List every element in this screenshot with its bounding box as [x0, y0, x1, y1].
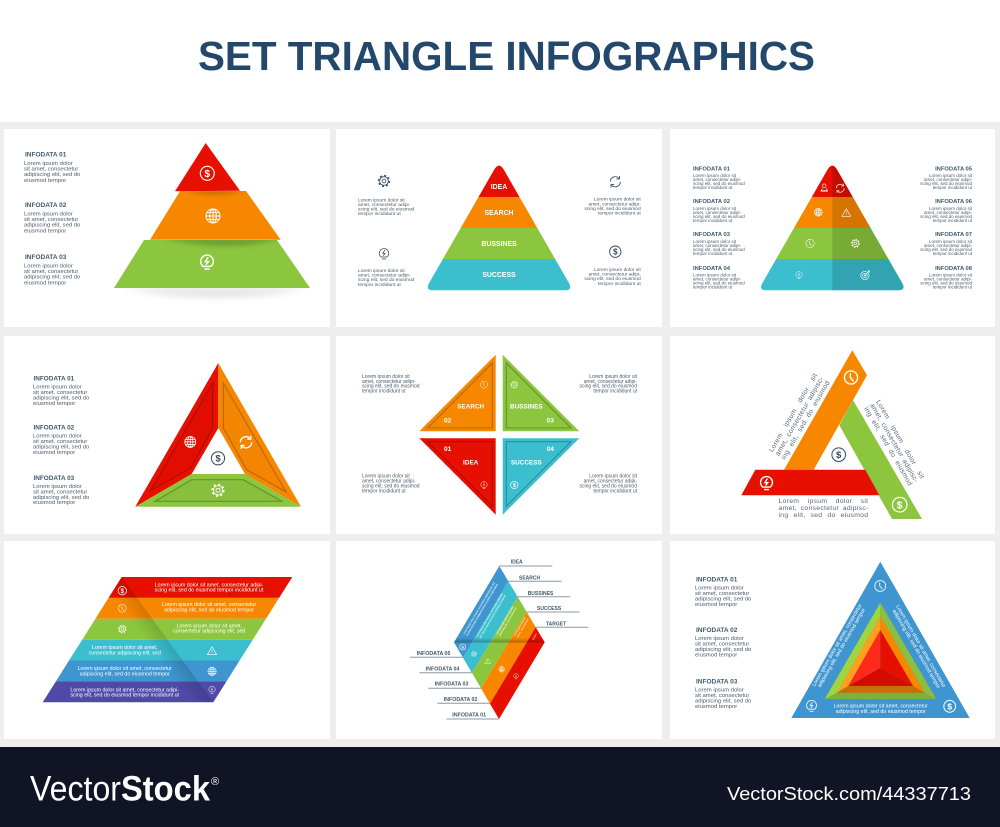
notes 01-03: sit amet, consectetur — [33, 390, 87, 396]
text block: infodata 03 — [24, 254, 81, 286]
rotated text: right side: adipiscing elit, sed do eiusmod tempor — [891, 609, 941, 690]
icon: dollar: $ — [205, 169, 211, 180]
callouts left — [410, 651, 499, 719]
text block: upper right: tempor incididunt ut — [598, 210, 641, 216]
orange layer — [837, 616, 925, 693]
rotated text: green ribbon: ing elit, sed do eiusmod — [862, 406, 913, 487]
rotated text: green ribbon: amet, consectetur adipisc- — [868, 402, 919, 484]
rotated text: green ribbon: Lorem ipsum dolor sit — [874, 399, 925, 480]
text block: lower left: tempor incididunt ut — [358, 282, 401, 288]
text block: lower right: amet, consectetur adipi- — [584, 479, 637, 485]
footer bar — [0, 747, 1000, 827]
text block: upper right: Lorem ipsum dolor sit — [589, 374, 638, 380]
notes 01-03: Lorem ipsum dolor — [695, 586, 744, 592]
text block: upper left: scing elit, sed do eiusmod — [358, 206, 415, 212]
right notes 05-08: Lorem ipsum dolor sit — [929, 173, 973, 178]
logo — [30, 770, 219, 808]
band text: consectetur adipiscing elit, sed — [173, 629, 245, 635]
left notes 01-04: scing elit, sed do eiusmod — [693, 214, 745, 219]
left notes 01-04: scing elit, sed do eiusmod — [693, 281, 745, 286]
strip text: Lorem — [532, 633, 538, 641]
left notes 01-04: INFODATA 01 — [693, 166, 731, 172]
right notes 05-08: INFODATA 07 — [935, 232, 972, 238]
text block: infodata 02: INFODATA 02 — [25, 202, 67, 209]
strip text: Lorem ipsum dolor sit — [513, 617, 527, 637]
notes 01-03: adipiscing elit, sed do — [33, 396, 90, 402]
text block: bottom — [778, 498, 869, 519]
icon: bulb — [807, 700, 816, 711]
text block: infodata 01: INFODATA 01 — [25, 152, 67, 159]
outer blue triangle — [791, 562, 970, 718]
notes 01-03: adipiscing elit, sed do — [695, 699, 752, 705]
left notes 01-04: Lorem ipsum dolor sit — [693, 273, 737, 278]
text block: infodata 01: sit amet, consectetur — [24, 167, 78, 173]
left notes 01-04: INFODATA 04 — [693, 266, 731, 272]
text block: infodata 03: adipiscing elit, sed do — [24, 275, 81, 281]
text block: infodata 03: INFODATA 03 — [25, 254, 67, 261]
bottom text: Lorem ipsum dolor sit amet, consectetur — [834, 704, 928, 710]
text block: lower left: scing elit, sed do eiusmod — [358, 277, 415, 283]
right notes 05-08: scing elit, sed do eiusmod — [920, 281, 972, 286]
triangle 01 idea: IDEA — [463, 459, 479, 466]
notes 01-03: eiusmod tempor — [33, 500, 75, 506]
callouts left: INFODATA 03 — [435, 682, 468, 688]
band text: adipiscing elit, sed do eiusmod tempor — [80, 672, 170, 678]
notes 01-03: Lorem ipsum dolor — [695, 636, 744, 642]
panel: four-triangle diamond — [336, 336, 662, 534]
icon: dollar centre: $ — [215, 454, 221, 464]
left notes 01-04: scing elit, sed do eiusmod — [693, 247, 745, 252]
logo: Stock — [121, 770, 210, 808]
text block: lower left: amet, consectetur adipi- — [362, 479, 416, 485]
notes 01-03 — [695, 577, 752, 710]
triangle 01 idea — [419, 438, 496, 515]
left notes 01-04: amet, consectetur adipi- — [693, 243, 742, 248]
panel: interlocking ribbons triangle — [670, 336, 995, 534]
strip text: do eiusmod tempor incididunt ut labore et dolore magna aliqua — [466, 583, 499, 637]
right notes 05-08: amet, consectetur adipi- — [924, 277, 972, 282]
icon: clock — [875, 580, 886, 591]
right notes 05-08: scing elit, sed do eiusmod — [920, 247, 972, 252]
text block: infodata 02: eiusmod tempor — [24, 228, 66, 234]
text block: lower left: amet, consectetur adipi- — [358, 273, 411, 279]
left notes 01-04 — [693, 166, 745, 290]
text block: infodata 01: eiusmod tempor — [24, 178, 66, 184]
right notes 05-08: INFODATA 05 — [935, 166, 973, 172]
band labels — [481, 184, 517, 279]
text block: lower right: tempor incididunt ut — [598, 281, 641, 287]
strip text: Lorem ipsum dolor sit amet, consectetur — [495, 605, 515, 636]
notes 01-03: adipiscing elit, sed do — [33, 495, 90, 501]
triangle 03 business — [503, 355, 579, 431]
notes 01-03: adipiscing elit, sed do — [695, 647, 752, 653]
icon: dollar — [944, 700, 956, 712]
left notes 01-04: tempor incididunt ut — [693, 185, 733, 190]
strip text: adipiscing elit, sed do eiusmod — [498, 607, 518, 637]
band text: Lorem ipsum dolor sit amet, consectetur adipi- — [155, 582, 264, 588]
left notes 01-04: amet, consectetur adipi- — [693, 177, 742, 182]
text block: upper right: Lorem ipsum dolor sit — [594, 197, 641, 203]
split pyramid — [760, 166, 904, 290]
triangle 02 search: SEARCH — [457, 403, 485, 410]
text block: infodata 02: sit amet, consectetur — [24, 217, 78, 223]
text block: infodata 03: Lorem ipsum dolor — [24, 264, 73, 270]
notes 01-03: eiusmod tempor — [695, 704, 737, 710]
rotated text: right side: Lorem ipsum dolor sit amet, consectetur — [894, 604, 947, 689]
right notes 05-08: INFODATA 08 — [935, 266, 973, 272]
text block: upper left: Lorem ipsum dolor sit — [358, 197, 405, 203]
callouts left: INFODATA 02 — [444, 697, 477, 703]
text block: lower right: Lorem ipsum dolor sit — [589, 474, 638, 480]
text block: infodata 03: sit amet, consectetur — [24, 269, 78, 275]
strip text: Lorem ipsum dolor sit amet, consectetur adipiscing elit, sed — [463, 581, 496, 635]
right notes 05-08: tempor incididunt ut — [933, 251, 973, 256]
callouts right — [499, 560, 588, 628]
pyramid layer: green — [114, 238, 310, 288]
notes 01-03: sit amet, consectetur — [33, 439, 87, 445]
rotated text: orange ribbon: amet, consectetur adipisc- — [774, 376, 826, 457]
right notes 05-08: amet, consectetur adipi- — [924, 210, 972, 215]
text block: upper right: scing elit, sed do eiusmod — [579, 384, 637, 390]
logo: Vector — [30, 770, 121, 808]
icon: gear — [379, 176, 389, 186]
band text: Lorem ipsum dolor sit amet, consectetur — [78, 666, 172, 672]
callouts right: TARGET — [546, 622, 566, 628]
text block: upper right: tempor incididunt ut — [593, 389, 638, 395]
band labels: BUSSINES — [481, 241, 517, 248]
panel: striped parallelogram — [4, 541, 330, 739]
band labels: SEARCH — [484, 210, 514, 217]
right notes 05-08: tempor incididunt ut — [933, 218, 973, 223]
text block: upper left: tempor incididunt ut — [358, 211, 401, 217]
text block: bottom: Lorem ipsum dolor sit — [778, 498, 868, 505]
text block: infodata 02: Lorem ipsum dolor — [24, 212, 73, 218]
callouts right: BUSSINES — [528, 591, 554, 597]
triangle 04 success — [503, 438, 579, 515]
image id: VectorStock.com/44337713 — [727, 784, 971, 804]
icon: dollar: $ — [947, 701, 952, 711]
text block: upper left: tempor incididunt ut — [362, 389, 406, 395]
notes 01-03: INFODATA 01 — [34, 376, 75, 383]
strip text: Lorem ipsum dolor sit amet, consectetur adipiscing — [476, 592, 504, 638]
text block: infodata 01: Lorem ipsum dolor — [24, 161, 73, 167]
notes 01-03: eiusmod tempor — [695, 602, 737, 608]
rotated text: orange ribbon: ing elit, sed do eiusmod — [781, 380, 832, 461]
band icons — [118, 586, 217, 693]
icon: dollar centre: $ — [836, 450, 842, 461]
icon: dollar centre — [211, 452, 225, 465]
text block: upper right: amet, consectetur adipi- — [588, 201, 641, 207]
panel: striped diamond with callouts — [336, 541, 662, 739]
right notes 05-08: Lorem ipsum dolor sit — [929, 206, 973, 211]
rotated text: left side: adipiscing elit, sed do eiusmod tempor — [817, 607, 867, 689]
rotated text: left side: Lorem ipsum dolor sit amet, consectetur — [811, 603, 864, 688]
left notes 01-04: Lorem ipsum dolor sit — [693, 206, 737, 211]
pyramid icons — [796, 184, 869, 280]
text block: upper left: scing elit, sed do eiusmod — [362, 384, 420, 390]
icon: dollar — [610, 246, 621, 257]
right notes 05-08: Lorem ipsum dolor sit — [929, 273, 973, 278]
left notes 01-04: tempor incididunt ut — [693, 251, 733, 256]
panel: split pyramid with eight notes — [670, 129, 995, 327]
notes 01-03: adipiscing elit, sed do — [33, 444, 90, 450]
text block: infodata 03: eiusmod tempor — [24, 280, 66, 286]
triangle segment: orange — [218, 363, 301, 507]
text block: infodata 02: adipiscing elit, sed do — [24, 223, 81, 229]
left notes 01-04: INFODATA 03 — [693, 232, 731, 238]
text block: lower right: Lorem ipsum dolor sit — [594, 267, 641, 273]
right notes 05-08: tempor incididunt ut — [933, 285, 973, 290]
right notes 05-08: tempor incididunt ut — [933, 185, 973, 190]
triangle 03 business: BUSSINES — [510, 403, 543, 410]
band icons: $ — [121, 589, 125, 595]
text block: lower left: tempor incididunt ut — [362, 488, 406, 494]
text block: lower right: amet, consectetur adipi- — [588, 272, 641, 278]
notes 01-03: eiusmod tempor — [33, 450, 75, 456]
text block: lower right: scing elit, sed do eiusmod — [579, 483, 637, 489]
ribbon: green — [839, 400, 922, 519]
pyramid layer: red — [175, 143, 240, 191]
red centre pyramid — [848, 630, 913, 686]
band labels: IDEA — [491, 184, 507, 191]
band text: consectetur adipiscing elit, sed — [89, 651, 161, 657]
strip text: amet, consectetur — [516, 618, 530, 638]
callouts left: INFODATA 05 — [417, 651, 450, 657]
text block: upper left: Lorem ipsum dolor sit — [362, 374, 410, 380]
panel: labelled pyramid with four side notes — [336, 129, 662, 327]
notes 01-03 — [33, 376, 90, 506]
notes 01-03: eiusmod tempor — [695, 652, 737, 658]
notes 01-03: INFODATA 02 — [696, 627, 738, 634]
parallelogram bands — [43, 577, 292, 702]
strip text: elit, sed do eiusmod tempor incididunt ut labore — [479, 594, 507, 639]
title: SET TRIANGLE INFOGRAPHICS — [198, 33, 815, 79]
callouts left: INFODATA 01 — [452, 712, 486, 718]
text block: upper right: amet, consectetur adipi- — [584, 379, 637, 385]
notes 01-03: Lorem ipsum dolor — [33, 385, 82, 391]
notes 01-03: sit amet, consectetur — [695, 642, 749, 648]
pyramid with four bands — [428, 166, 570, 290]
right notes 05-08: amet, consectetur adipi- — [924, 177, 972, 182]
notes 01-03: INFODATA 03 — [34, 475, 75, 482]
text block: upper right: scing elit, sed do eiusmod — [584, 206, 641, 212]
notes 01-03: INFODATA 03 — [696, 679, 738, 686]
pyramid layer: orange — [150, 189, 281, 240]
text block: bottom: ing elit, sed do eiusmod — [778, 512, 868, 519]
right notes 05-08: scing elit, sed do eiusmod — [920, 214, 972, 219]
triangle 02 search: 02 — [444, 418, 452, 425]
ribbon: orange — [784, 350, 867, 470]
icon: dollar: $ — [613, 248, 618, 256]
triangle 01 idea: 01 — [444, 446, 452, 453]
left notes 01-04: Lorem ipsum dolor sit — [693, 173, 737, 178]
bottom text: adipiscing elit, sed do eiusmod tempor — [836, 709, 926, 715]
text block: lower left: scing elit, sed do eiusmod — [362, 483, 420, 489]
notes 01-03: sit amet, consectetur — [33, 489, 87, 495]
right notes 05-08 — [920, 166, 973, 290]
diamond strips — [450, 566, 550, 719]
triangle segment: red — [135, 363, 218, 507]
left notes 01-04: amet, consectetur adipi- — [693, 277, 742, 282]
triangle 04 success: SUCCESS — [511, 459, 542, 466]
notes 01-03: INFODATA 02 — [34, 425, 75, 432]
icon: dollar centre — [832, 448, 846, 462]
notes 01-03: Lorem ipsum dolor — [33, 484, 82, 490]
text block: lower right: scing elit, sed do eiusmod — [584, 276, 641, 282]
band text: Lorem ipsum dolor sit amet, — [177, 623, 242, 629]
left notes 01-04: scing elit, sed do eiusmod — [693, 181, 745, 186]
callouts right: SUCCESS — [537, 606, 562, 612]
pyramid shadow — [122, 288, 308, 297]
triangle 03 business: 03 — [547, 418, 554, 425]
left notes 01-04: tempor incididunt ut — [693, 285, 733, 290]
left notes 01-04: INFODATA 02 — [693, 199, 730, 205]
triangle segment: green — [135, 474, 301, 507]
panel: nested triangles — [670, 541, 995, 739]
band text: adipiscing elit, sed do eiusmod tempor — [164, 608, 254, 614]
logo: ® — [211, 776, 219, 788]
text block: lower left: Lorem ipsum dolor sit — [362, 474, 410, 480]
panel: three-layer pyramid — [4, 129, 330, 327]
bottom text — [834, 704, 928, 715]
notes 01-03: sit amet, consectetur — [695, 693, 749, 699]
left notes 01-04: amet, consectetur adipi- — [693, 210, 742, 215]
text block: infodata 01 — [24, 152, 81, 184]
left notes 01-04: Lorem ipsum dolor sit — [693, 239, 737, 244]
left notes 01-04: tempor incididunt ut — [693, 218, 733, 223]
text block: infodata 01: adipiscing elit, sed do — [24, 172, 81, 178]
callouts right: SEARCH — [519, 575, 541, 581]
notes 01-03: eiusmod tempor — [33, 401, 75, 407]
rotated text: orange ribbon: Lorem ipsum dolor sit — [768, 372, 819, 454]
right notes 05-08: Lorem ipsum dolor sit — [929, 239, 973, 244]
notes 01-03: Lorem ipsum dolor — [33, 434, 82, 440]
notes 01-03: adipiscing elit, sed do — [695, 597, 752, 603]
band text: scing elit, sed do eiusmod tempor incididunt ut — [155, 588, 264, 594]
text block: lower left: Lorem ipsum dolor sit — [358, 268, 405, 274]
band text: Lorem ipsum dolor sit amet, — [92, 645, 157, 651]
notes 01-03: Lorem ipsum dolor — [695, 688, 744, 694]
text block: infodata 02 — [24, 202, 81, 234]
text block: lower right: tempor incididunt ut — [593, 488, 638, 494]
band text: Lorem ipsum dolor sit amet, consectetur — [162, 602, 256, 608]
icon: cycle — [610, 176, 620, 188]
panel: three-part hollow triangle — [4, 336, 330, 534]
notes 01-03: sit amet, consectetur — [695, 591, 749, 597]
ribbon: red — [741, 470, 879, 495]
callouts left: INFODATA 04 — [426, 666, 459, 672]
strip icons — [460, 644, 518, 679]
band text: scing elit, sed do eiusmod tempor incididunt ut — [70, 693, 180, 699]
triangle 02 search — [419, 355, 496, 431]
triangle 04 success: $ — [513, 483, 516, 489]
strip icons: $ — [462, 644, 465, 650]
text block: upper left: amet, consectetur adipi- — [362, 379, 416, 385]
band text — [70, 582, 264, 699]
callouts right: IDEA — [511, 560, 523, 566]
green layer — [825, 603, 936, 699]
notes 01-03: INFODATA 01 — [696, 577, 738, 584]
text block: upper left: amet, consectetur adipi- — [358, 202, 411, 208]
icon: bulb — [379, 249, 389, 259]
strip text — [463, 581, 538, 641]
triangle 04 success: 04 — [547, 446, 554, 453]
right notes 05-08: scing elit, sed do eiusmod — [920, 181, 972, 186]
ribbon: green: $ — [897, 500, 903, 512]
band labels: SUCCESS — [482, 272, 516, 279]
band text: Lorem ipsum dolor sit amet, consectetur adipi- — [70, 687, 179, 693]
right notes 05-08: amet, consectetur adipi- — [924, 243, 972, 248]
text block: bottom: amet, consectetur adipisc- — [778, 505, 869, 512]
right notes 05-08: INFODATA 06 — [935, 199, 973, 205]
